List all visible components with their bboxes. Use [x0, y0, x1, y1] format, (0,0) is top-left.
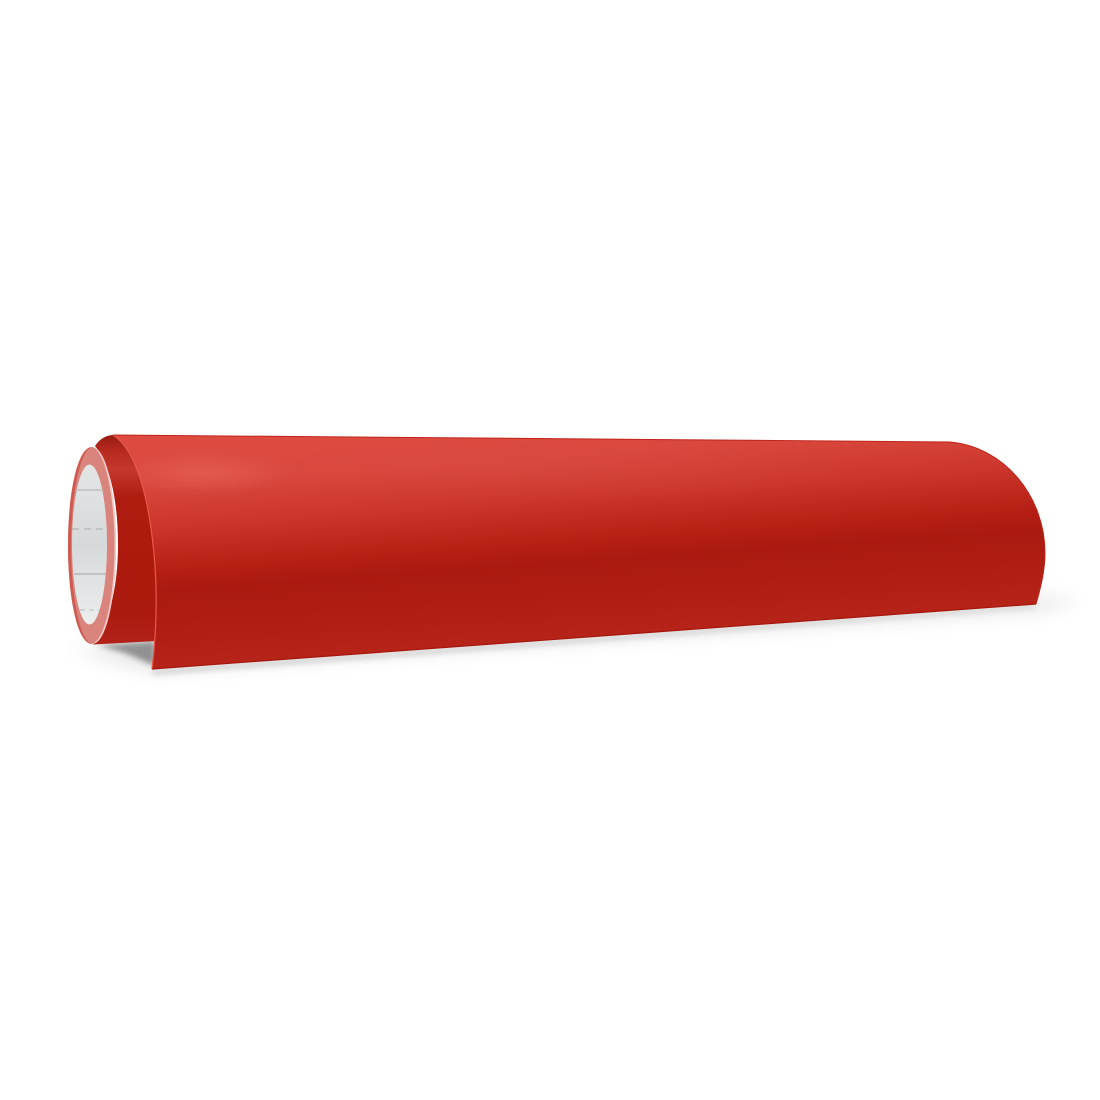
product illustration: red vinyl roll: [68, 434, 1060, 678]
roll end ring: [68, 447, 116, 644]
sheet outline highlights: [113, 435, 156, 669]
floor shadow: [70, 596, 1085, 675]
cardboard core: [72, 464, 107, 624]
front vinyl sheet: [113, 435, 1045, 669]
roll body behind the sheet: [93, 435, 175, 644]
